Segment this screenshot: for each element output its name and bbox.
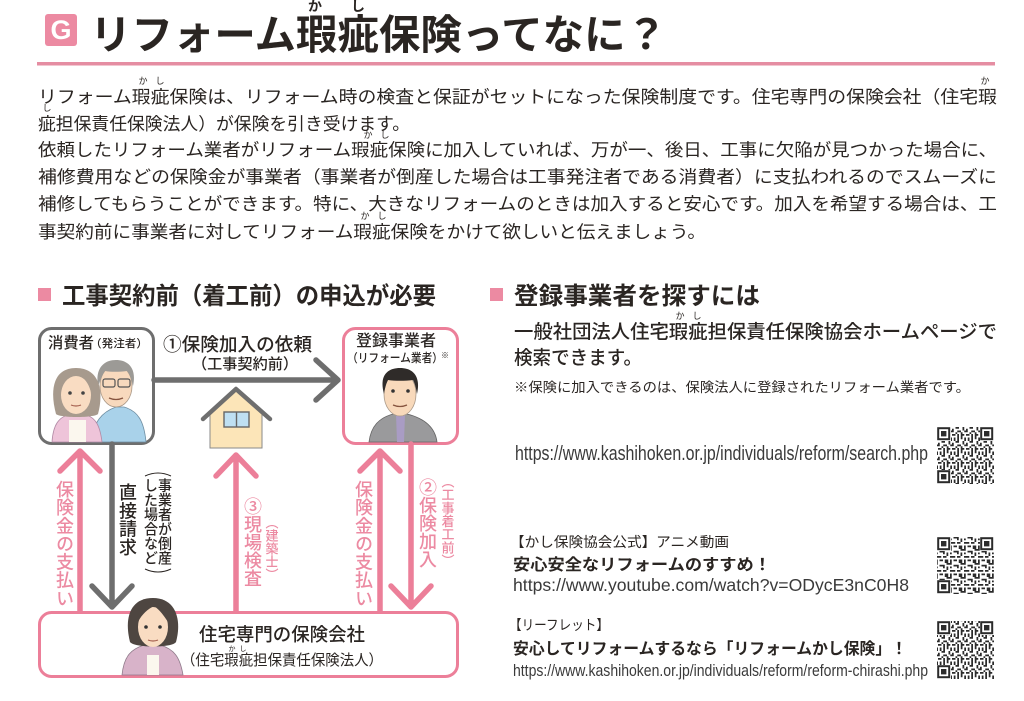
label: step 3	[240, 497, 282, 587]
text block: animation video: https://www.youtube.com/watch?v=ODycE3nC0H8	[513, 575, 909, 595]
panel: insurance company: し	[240, 645, 246, 653]
text block: leaflet	[509, 615, 928, 680]
label: step 2	[415, 475, 458, 568]
note: ※保険に加入できるのは、保険法人に登録されたリフォーム業者です。	[514, 376, 970, 396]
title	[45, 0, 667, 61]
icon: house	[203, 389, 270, 448]
label: bankruptcy note	[141, 473, 175, 572]
icon: contractor man	[369, 368, 437, 442]
arrow: payment to consumer	[60, 451, 100, 612]
panel: registered contractor	[344, 327, 458, 444]
label: step 3: ③現場検査	[240, 497, 266, 587]
intro text block: か	[360, 211, 370, 221]
intro text block	[38, 76, 997, 244]
intro text block: し	[155, 76, 165, 86]
panel: registered contractor: 登録事業者	[356, 327, 436, 351]
label: insurance payout right: 保険金の支払い	[351, 480, 377, 607]
label: direct claim: 直接請求	[115, 483, 141, 556]
arrow: insurance enrolment	[391, 444, 431, 607]
label: step 2: ②保険加入	[415, 478, 441, 568]
icon: elderly man	[92, 360, 146, 442]
label: step 1	[163, 331, 312, 374]
panel: insurance company	[40, 598, 458, 676]
panel: consumer: 消費者	[48, 331, 94, 353]
label: step 2: （工事着工前）	[438, 475, 458, 567]
icon: G badge: G	[50, 15, 72, 45]
label: step 1: ①保険加入の依頼	[163, 331, 312, 357]
icon: QR code leaflet	[937, 621, 994, 679]
intro text block: し	[42, 103, 52, 113]
label: step 3: （建築士）	[262, 516, 282, 581]
arrow: request to contractor	[154, 360, 338, 400]
intro text block: リフォーム瑕疵保険は、リフォーム時の検査と保証がセットになった保険制度です。住宅専門の保険会社（住宅瑕	[38, 84, 997, 109]
intro text block: 疵担保責任保険法人）が保険を引き受けます。	[38, 111, 410, 136]
icon: elderly woman	[52, 368, 102, 442]
text: search description: か	[675, 311, 685, 321]
panel: insurance company: か	[228, 645, 236, 653]
text block: leaflet: 安心してリフォームするなら「リフォームかし保険」！	[513, 635, 907, 659]
panel: registered contractor: （リフォーム業者）	[347, 349, 443, 366]
link: search url: https://www.kashihoken.or.jp/individuals/reform/search.php	[515, 443, 928, 465]
heading: application before contract: 工事契約前（着工前）の申込が必要	[62, 276, 436, 311]
icon: QR code video	[937, 537, 994, 594]
diagram: insurance flow	[40, 327, 458, 676]
label: bankruptcy note: 事業者が倒産	[155, 478, 175, 566]
label: insurance payout left: 保険金の支払い	[52, 480, 78, 607]
text block: leaflet: 【リーフレット】	[509, 615, 609, 635]
text: search description: 一般社団法人住宅瑕疵担保責任保険協会ホームページで	[514, 317, 997, 344]
intro text block: か	[980, 76, 990, 86]
panel: insurance company: 住宅専門の保険会社	[199, 621, 365, 647]
intro text block: し	[380, 130, 390, 140]
panel: registered contractor: ※	[441, 351, 449, 360]
panel: insurance company: （住宅瑕疵担保責任保険法人）	[181, 649, 383, 670]
label: step 1: （工事契約前）	[192, 353, 298, 374]
arrow: site inspection	[216, 455, 256, 612]
intro text block: か	[363, 130, 373, 140]
text block: leaflet: https://www.kashihoken.or.jp/individuals/reform/reform-chirashi.php	[513, 661, 928, 680]
text: search description: 検索できます。	[514, 343, 642, 370]
title rule	[37, 62, 995, 66]
text block: animation video: 【かし保険協会公式】アニメ動画	[510, 532, 729, 552]
label: bankruptcy note: した場合など	[141, 478, 161, 565]
icon: G badge	[45, 14, 77, 46]
intro text block: 補修してもらうことができます。特に、大きなリフォームのときは加入すると安心です。加入を希望する場合は、工	[38, 191, 997, 216]
text block: animation video	[510, 532, 909, 595]
intro text block: 補修費用などの保険金が事業者（事業者が倒産した場合は工事発注者である消費者）に支払われるのでスムーズに	[38, 164, 997, 189]
intro text block: し	[377, 211, 387, 221]
icon: insurance agent	[122, 598, 183, 675]
text: search description	[514, 311, 997, 370]
icon: QR code search	[937, 427, 994, 484]
title text: リフォーム瑕疵保険ってなに？	[90, 1, 667, 61]
intro text block: 事契約前に事業者に対してリフォーム瑕疵保険をかけて欲しいと伝えましょう。	[38, 219, 706, 244]
heading: find registered contractors: 登録事業者を探すには	[514, 276, 760, 311]
panel: consumer	[40, 328, 154, 444]
panel: consumer: （発注者）	[90, 335, 148, 351]
intro text block: 依頼したリフォーム業者がリフォーム瑕疵保険に加入していれば、万が一、後日、工事に欠陥が見つかった場合に、	[38, 137, 997, 162]
intro text block: か	[138, 76, 148, 86]
arrow: payment to contractor	[360, 451, 400, 612]
arrow: direct claim	[92, 444, 132, 607]
text: search description: し	[692, 311, 702, 321]
text block: animation video: 安心安全なリフォームのすすめ！	[513, 551, 771, 575]
title ruby	[308, 0, 365, 14]
